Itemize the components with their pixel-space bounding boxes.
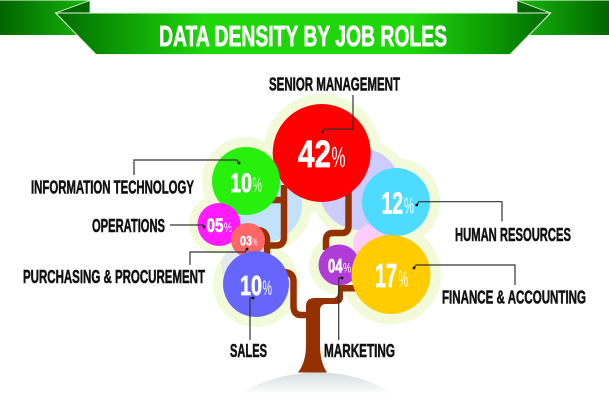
circle: senior management 42%: 42	[298, 134, 331, 176]
circle: sales 10%: %	[262, 277, 272, 300]
circle: marketing 04%: %	[343, 260, 351, 276]
label: senior management: SENIOR MANAGEMENT	[269, 74, 400, 94]
circle: sales 10%: 10	[240, 270, 262, 301]
label: information technology: INFORMATION TECHNOLOGY	[31, 178, 194, 198]
circle: human resources 12%: %	[404, 192, 414, 218]
circle: marketing 04%: 04	[328, 256, 343, 278]
circle: sales 10%	[223, 251, 289, 317]
label: sales: SALES	[230, 341, 267, 361]
circle: senior management 42%	[273, 104, 371, 202]
circle: human resources 12%	[362, 168, 430, 236]
tree halos	[189, 94, 441, 327]
circle: information technology 10%	[212, 147, 280, 215]
circle: finance 17%	[352, 235, 430, 314]
circle: human resources 12%: 12	[382, 186, 403, 220]
label: operations: OPERATIONS	[92, 216, 165, 236]
circle: purchasing 03%	[231, 223, 265, 257]
label: marketing: MARKETING	[324, 341, 395, 361]
circle: finance 17%: 17	[375, 257, 397, 294]
circle: operations 05%: 05	[206, 216, 224, 237]
circle: marketing 04%	[318, 244, 360, 286]
circle: finance 17%: %	[398, 266, 408, 292]
tree trunk and branches	[258, 185, 365, 372]
label: purchasing and procurement: PURCHASING & PROCUREMENT	[23, 267, 205, 287]
circle: purchasing 03%: 03	[240, 234, 252, 248]
circle: information technology 10%: %	[252, 174, 262, 197]
circle: operations 05%	[198, 203, 240, 246]
title: DATA DENSITY BY JOB ROLES	[159, 21, 447, 53]
circle: operations 05%: %	[224, 219, 232, 235]
leader lines	[134, 95, 515, 340]
circle: information technology 10%: 10	[230, 168, 252, 198]
circle: purchasing 03%: %	[252, 238, 258, 248]
ground mound	[240, 372, 392, 394]
circle: senior management 42%: %	[332, 142, 346, 174]
background pastel circles	[221, 148, 401, 285]
title banner	[0, 0, 609, 54]
